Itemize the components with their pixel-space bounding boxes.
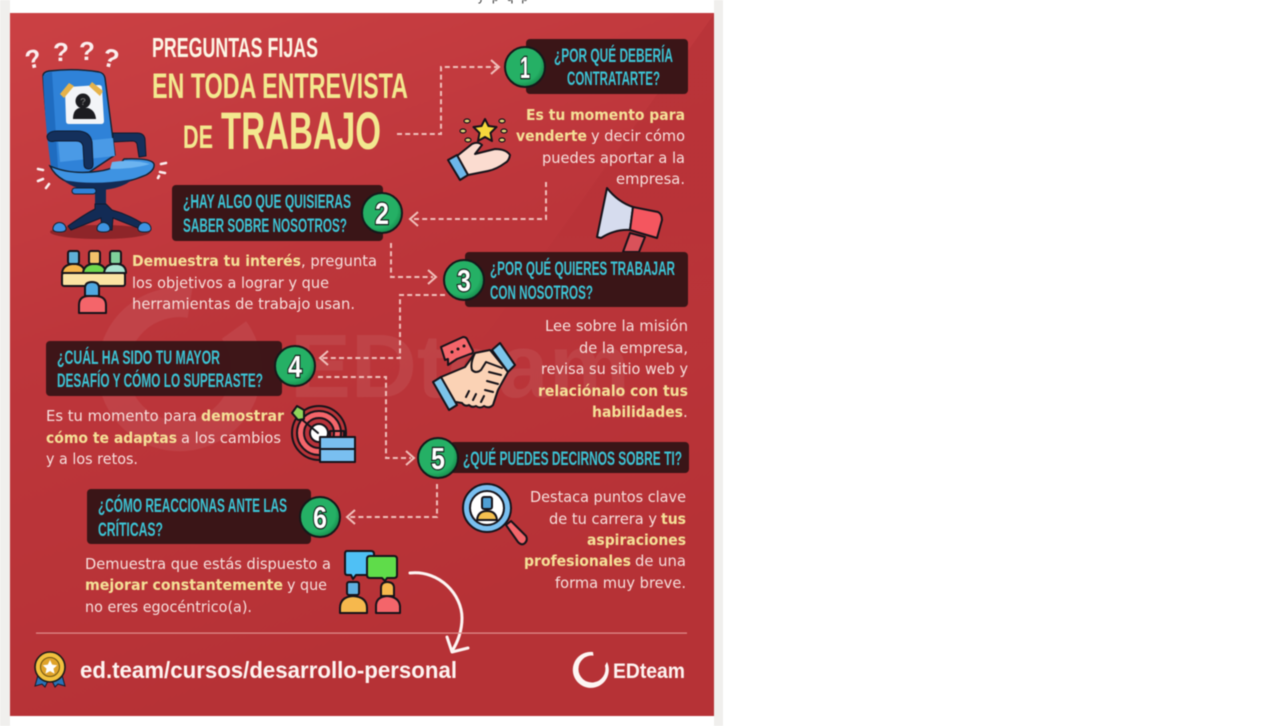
- text block 2: [132, 252, 377, 313]
- question 3: ¿POR QUÉ QUIERES TRABAJAR: [490, 258, 675, 280]
- text block 3: Lee sobre la misión: [545, 317, 688, 335]
- question 1: [505, 39, 688, 94]
- question 6: ¿CÓMO REACCIONAS ANTE LAS: [98, 495, 287, 517]
- question 4: 4: [288, 349, 303, 384]
- text block 1: empresa.: [616, 170, 685, 188]
- title: TRABAJO: [221, 102, 381, 161]
- icon: question marks: ?: [100, 42, 122, 75]
- text block 2: Demuestra tu interés: [132, 252, 301, 270]
- question 1: CONTRATARTE?: [567, 69, 660, 90]
- question 4: ¿CUÁL HA SIDO TU MAYOR: [57, 347, 220, 369]
- question 5: ¿QUÉ PUEDES DECIRNOS SOBRE TI?: [463, 448, 682, 470]
- icon: interview panel: [62, 251, 126, 313]
- text block 5: forma muy breve.: [555, 574, 686, 592]
- question 4: [46, 341, 315, 396]
- title: PREGUNTAS FIJAS: [152, 32, 318, 63]
- text block 1: Es tu momento para: [526, 106, 685, 124]
- text block 2: los objetivos a lograr y que: [132, 274, 329, 292]
- text block 5: de una: [635, 552, 686, 570]
- link text: ed.team/cursos/desarrollo-personal: [80, 657, 457, 683]
- text block 5: Destaca puntos clave: [530, 488, 686, 506]
- text block 4: cómo te adaptas: [46, 429, 177, 447]
- arrows: dashed connectors: [318, 60, 546, 524]
- icon: blue office chair: [43, 70, 154, 239]
- question 3: CON NOSOTROS?: [490, 283, 593, 304]
- text block 4: [46, 407, 285, 468]
- question 6: CRÍTICAS?: [98, 519, 163, 541]
- question 1: 1: [520, 50, 530, 85]
- text block 6: y que: [287, 576, 327, 594]
- question 2: SABER SOBRE NOSOTROS?: [183, 216, 347, 237]
- text block 3: de la empresa,: [579, 339, 688, 357]
- text block 6: Demuestra que estás dispuesto a: [85, 555, 331, 573]
- icon: chair motion marks: [38, 163, 166, 188]
- title: [152, 32, 408, 161]
- icon: handshake: [433, 337, 515, 410]
- question 1: ¿POR QUÉ DEBERÍA: [554, 45, 673, 67]
- text block 6: mejorar constantemente: [85, 576, 283, 594]
- question 3: 3: [457, 263, 471, 298]
- question 3: [444, 252, 688, 307]
- icon: hand with star: [448, 119, 510, 180]
- text block 1: puedes aportar a la: [542, 149, 685, 167]
- icon: magnifier with person: [463, 484, 527, 544]
- text block 5: aspiraciones: [587, 531, 686, 549]
- logo: EDteam: EDteam: [613, 660, 685, 683]
- text block 2: , pregunta: [301, 252, 377, 270]
- icon: target with briefcase: [292, 406, 355, 462]
- arrow: white curved arrow: [410, 573, 468, 652]
- text block 6: [85, 555, 331, 616]
- text block 3: habilidades: [592, 403, 683, 421]
- text block 3: .: [683, 403, 688, 421]
- watermark: EDteam: EDteam: [290, 317, 630, 417]
- icon: medal: [35, 652, 65, 687]
- text block 3: revisa su sitio web y: [541, 360, 688, 378]
- question 5: [418, 438, 689, 478]
- text block 2: herramientas de trabajo usan.: [132, 295, 355, 313]
- question 6: 6: [313, 500, 327, 535]
- text block 5: tus: [661, 510, 686, 528]
- text block 4: Es tu momento para: [46, 407, 197, 425]
- photo on chair back: ?: [80, 97, 86, 108]
- title: DE: [183, 119, 213, 155]
- text block 3: [538, 317, 688, 421]
- text block 3: relaciónalo con tus: [538, 382, 688, 400]
- text block 4: demostrar: [201, 407, 285, 425]
- footer divider: [36, 632, 687, 634]
- text block 5: [524, 488, 686, 592]
- question 5: 5: [431, 441, 445, 476]
- icon: question marks: ?: [53, 37, 69, 67]
- page side strips: [0, 0, 723, 726]
- question 2: 2: [375, 196, 389, 231]
- photo on chair back: [60, 82, 104, 124]
- watermark: EDteam: [113, 302, 630, 436]
- question 2: ¿HAY ALGO QUE QUISIERAS: [183, 192, 351, 213]
- icon: chat between two people: [340, 551, 400, 613]
- logo: EDteam: [573, 652, 685, 688]
- title: EN TODA ENTREVISTA: [152, 67, 408, 106]
- text block 6: no eres egocéntrico(a).: [85, 598, 252, 616]
- question 4: DESAFÍO Y CÓMO LO SUPERASTE?: [57, 370, 263, 392]
- icon: question marks: ?: [22, 42, 44, 75]
- icon: question marks: ?: [79, 36, 95, 66]
- text block 1: y decir cómo: [591, 127, 685, 145]
- text block 1: venderte: [516, 127, 587, 145]
- text block 5: profesionales: [524, 552, 631, 570]
- question 2: [172, 185, 402, 241]
- text block 4: a los cambios: [181, 429, 281, 447]
- text block 1: [516, 106, 685, 188]
- text block 4: y a los retos.: [46, 450, 138, 468]
- panel: red infographic background: [10, 13, 714, 716]
- icon: question marks: [22, 36, 122, 75]
- icon: megaphone: [597, 188, 662, 252]
- question 6: [87, 489, 340, 544]
- text block 5: de tu carrera y: [549, 510, 657, 528]
